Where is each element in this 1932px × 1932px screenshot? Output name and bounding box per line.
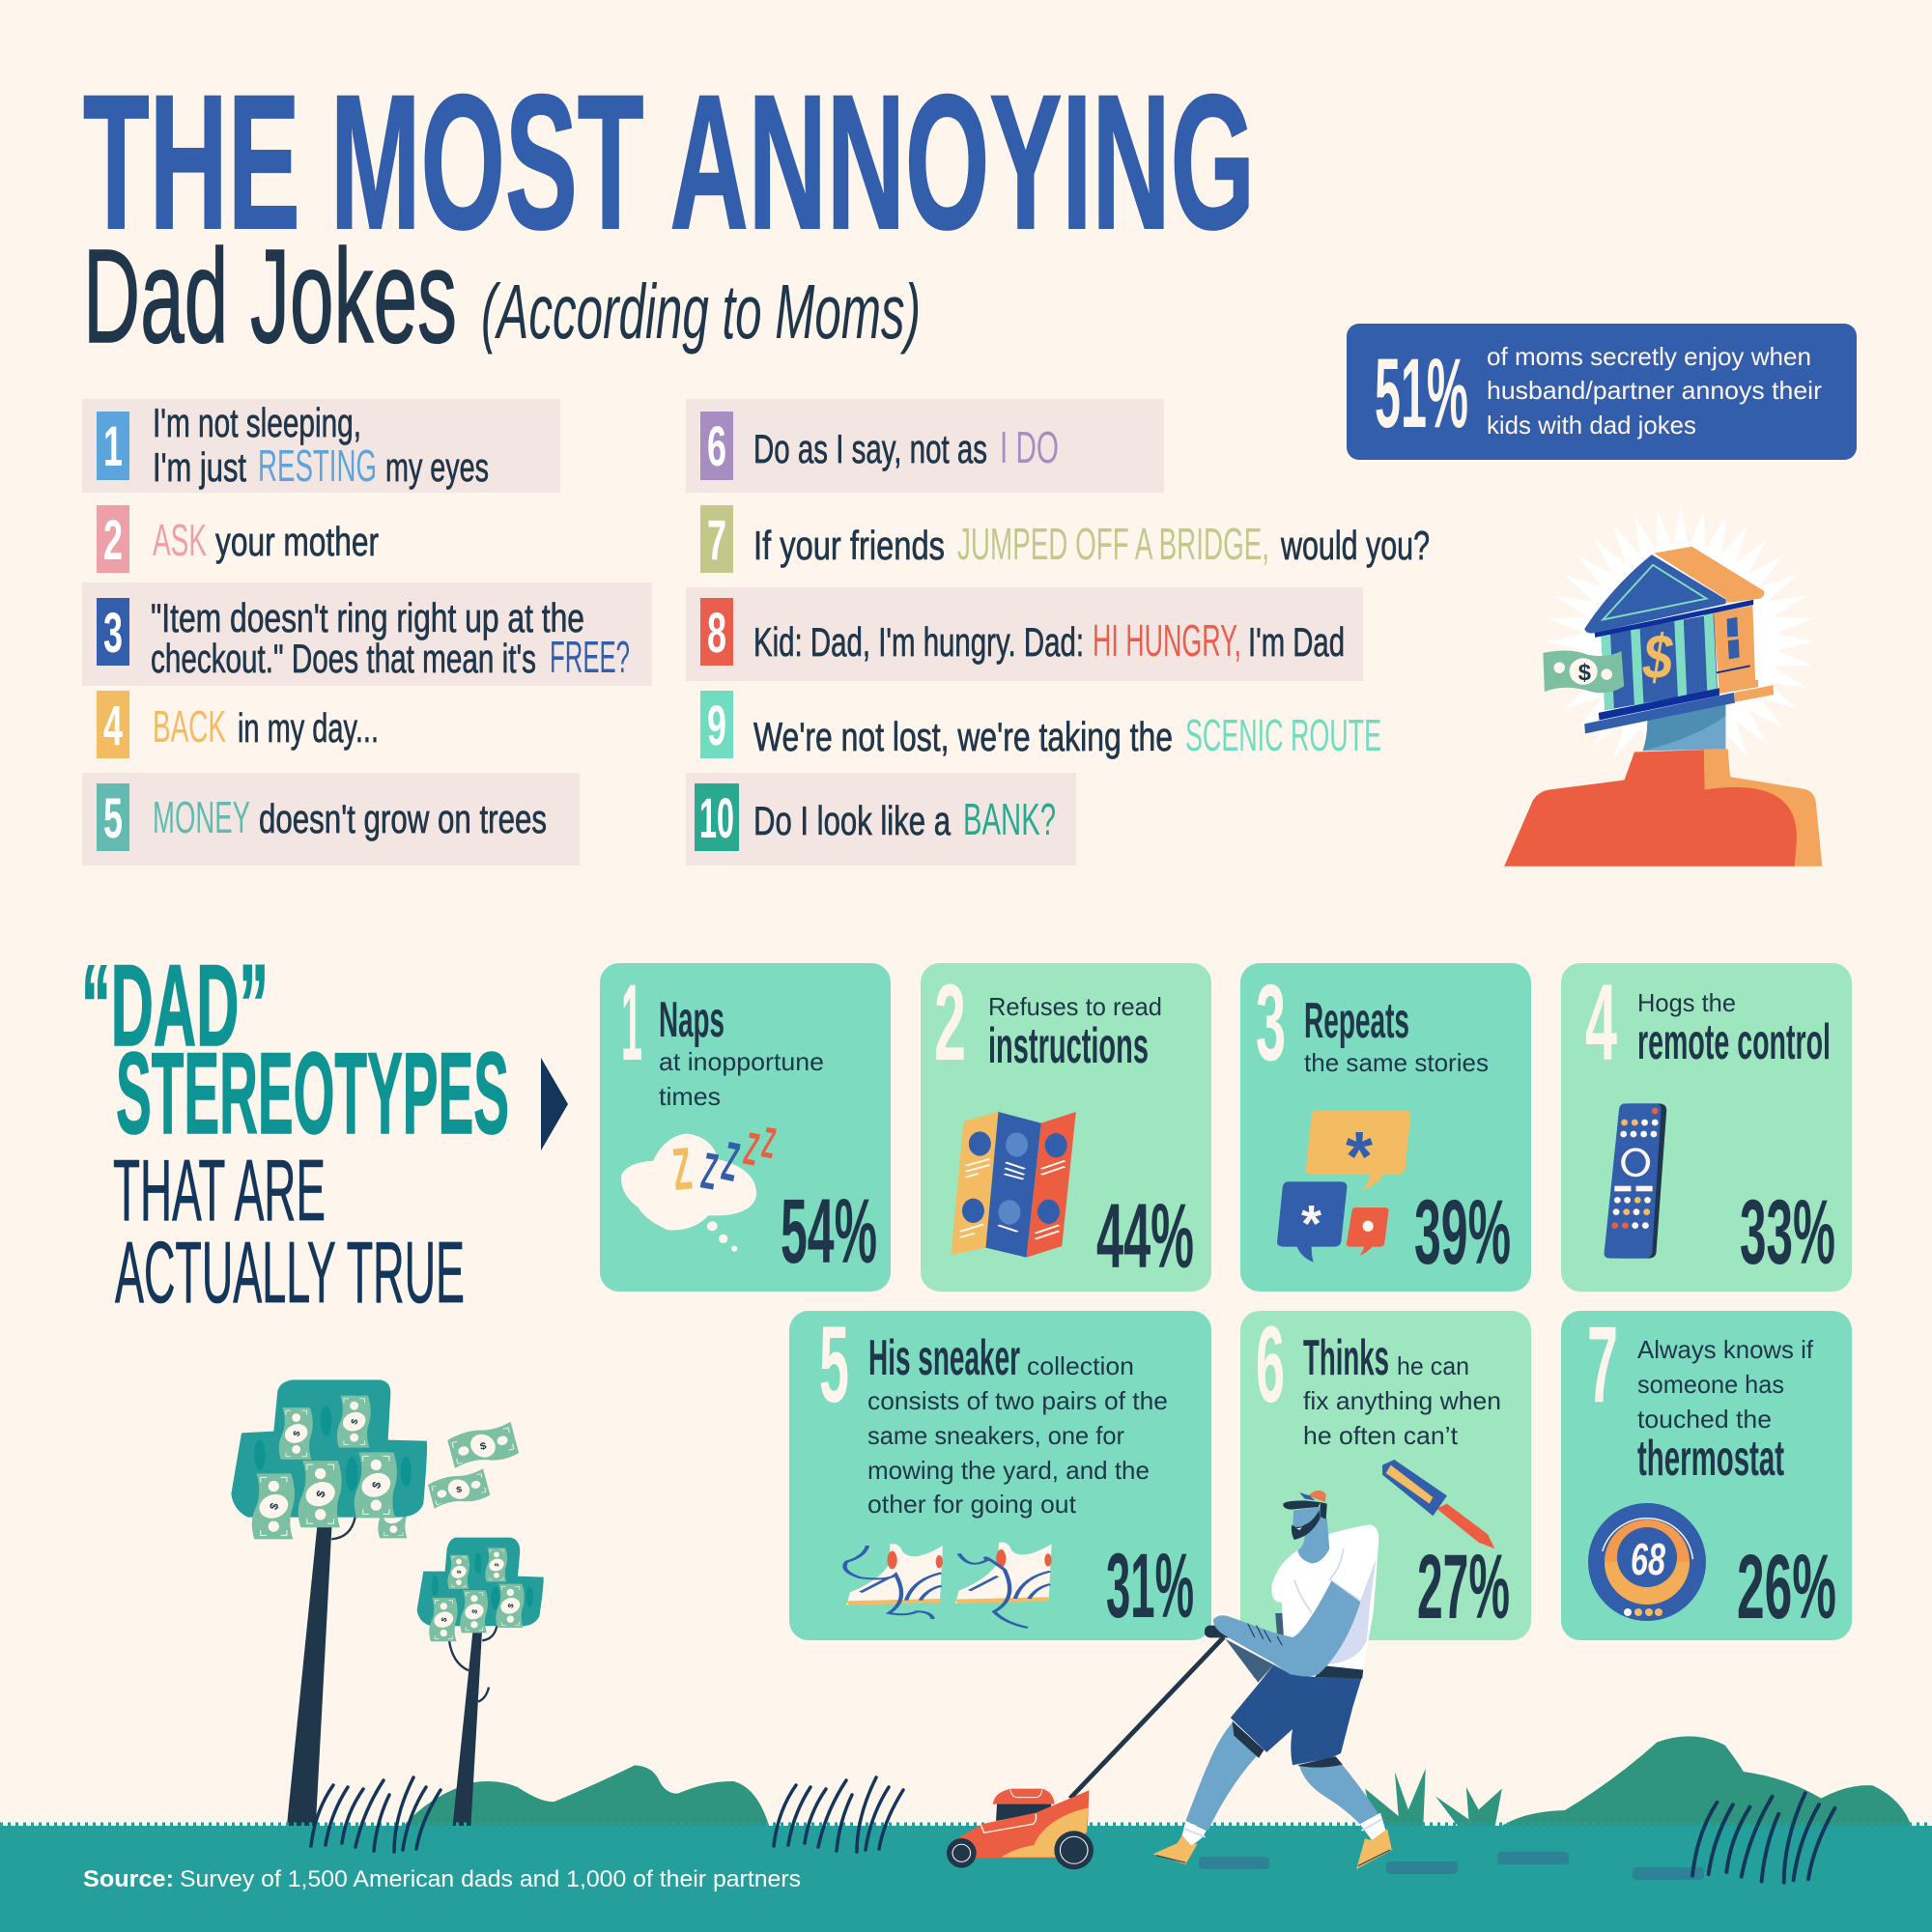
- callout: 51% of moms: husband/partner annoys their: [1487, 376, 1822, 405]
- money tree large and small: $: [350, 1417, 361, 1426]
- joke 1: my eyes: [385, 444, 489, 490]
- heading: dad stereotypes: “DAD”: [81, 941, 269, 1070]
- joke 1: RESTING: [258, 440, 377, 491]
- list of dad jokes: [82, 399, 1430, 866]
- money tree large and small: $: [292, 1429, 303, 1437]
- joke 6: I DO: [1000, 422, 1059, 472]
- callout: 51% of moms: [1347, 324, 1857, 460]
- lawnmower: [947, 1637, 1224, 1869]
- panel: stereotype 4 remote: Hogs the: [1637, 988, 1736, 1017]
- panel: stereotype 2 instructions: Refuses to read: [988, 992, 1162, 1021]
- panel: stereotype 2 instructions: instructions: [988, 1018, 1149, 1074]
- joke 7: would you?: [1280, 523, 1430, 568]
- icon: speech bubbles: *: [1346, 1119, 1373, 1196]
- joke 7: If your friends: [753, 523, 945, 568]
- icon: sleep cloud: Z: [697, 1141, 722, 1201]
- joke 9: [700, 691, 1381, 760]
- panel: stereotype 5 sneakers: other for going out: [867, 1490, 1077, 1519]
- panel: stereotype 3 repeats: 39%: [1414, 1181, 1511, 1284]
- panel: stereotype 6 thinks he can fix: he can: [1397, 1351, 1469, 1380]
- panel: stereotype 5 sneakers: consists of two pairs of the: [867, 1386, 1168, 1415]
- panel: stereotype 7 thermostat: [1561, 1304, 1852, 1640]
- money tree large and small: $: [494, 1562, 501, 1568]
- heading: dad stereotypes: THAT ARE: [113, 1143, 326, 1239]
- panel: stereotype 1 naps: times: [659, 1082, 721, 1111]
- panel: stereotype 1 naps: at inopportune: [659, 1047, 824, 1076]
- joke 7: 7: [707, 509, 726, 572]
- icon: screwdriver: [1382, 1460, 1494, 1548]
- icon: instruction brochure: [951, 1112, 1076, 1258]
- money tree large and small: $: [440, 1616, 449, 1623]
- money tree large and small: $: [313, 1489, 328, 1499]
- money tree large and small: $: [479, 1441, 487, 1453]
- icon: sneakers: [845, 1542, 1052, 1628]
- grass tufts: [311, 1777, 1835, 1883]
- joke 3: checkout." Does that mean it's: [151, 636, 536, 681]
- money tree large and small: $: [456, 1569, 464, 1575]
- joke 2: ASK: [153, 515, 207, 565]
- joke 8: 8: [707, 602, 726, 665]
- joke 5: 5: [103, 787, 123, 850]
- panel: stereotype 4 remote: 4: [1585, 962, 1617, 1083]
- arrow: [541, 1058, 568, 1151]
- icon: sleep cloud: Z: [717, 1130, 744, 1194]
- money tree large and small: $: [267, 1501, 282, 1512]
- panel: stereotype 3 repeats: Repeats: [1304, 993, 1409, 1049]
- panel: stereotype 7 thermostat: 26%: [1737, 1536, 1836, 1638]
- joke 4: in my day...: [238, 705, 379, 751]
- joke 8: HI HUNGRY,: [1093, 615, 1241, 666]
- joke 2: 2: [103, 509, 123, 572]
- heading: dad stereotypes: ACTUALLY TRUE: [115, 1225, 465, 1321]
- joke 9: SCENIC ROUTE: [1185, 710, 1381, 760]
- icon: bank-headed dad: $: [1642, 622, 1673, 693]
- money tree large and small: $: [456, 1485, 464, 1495]
- panel: stereotype 3 repeats: 3: [1256, 962, 1286, 1083]
- title: [83, 55, 1255, 371]
- panel: stereotype 5 sneakers: 5: [819, 1304, 849, 1425]
- panel: stereotype 4 remote: [1561, 962, 1852, 1292]
- joke 6: [686, 399, 1164, 493]
- ground: [0, 1825, 1932, 1932]
- joke 10: 10: [699, 787, 734, 850]
- joke 1: 1: [103, 415, 123, 478]
- panel: stereotype 6 thinks he can fix: fix anything when: [1303, 1386, 1501, 1415]
- money tree large and small: [231, 1379, 544, 1829]
- panel: stereotype 6 thinks he can fix: 27%: [1417, 1536, 1510, 1638]
- panel: stereotype 7 thermostat: someone has: [1637, 1370, 1784, 1399]
- joke 5: MONEY: [153, 792, 250, 842]
- money tree large and small: $: [469, 1607, 479, 1615]
- joke 8: [686, 587, 1363, 681]
- man pushing lawnmower: [947, 1491, 1392, 1869]
- callout: 51% of moms: of moms secretly enjoy when: [1487, 342, 1811, 371]
- joke 8: Kid: Dad, I'm hungry. Dad:: [753, 619, 1084, 665]
- callout: 51% of moms: kids with dad jokes: [1487, 411, 1696, 440]
- hills and grass plants: [401, 1736, 1913, 1829]
- icon: speech bubbles: [1277, 1110, 1410, 1263]
- panel: stereotype 5 sneakers: mowing the yard, and the: [867, 1456, 1150, 1485]
- panel: stereotype 5 sneakers: His sneaker: [868, 1330, 1020, 1386]
- callout: 51% of moms: 51%: [1375, 338, 1468, 448]
- panel: stereotype 1 naps: [600, 962, 891, 1292]
- joke 1: [82, 399, 560, 493]
- joke 9: We're not lost, we're taking the: [753, 714, 1173, 759]
- panel: stereotype 5 sneakers: collection: [1027, 1351, 1134, 1380]
- joke 10: BANK?: [963, 794, 1056, 844]
- joke 2: your mother: [215, 519, 379, 564]
- joke 1: I'm just: [153, 444, 246, 490]
- joke 5: [82, 773, 580, 866]
- panel: stereotype 5 sneakers: [789, 1304, 1211, 1640]
- title: (According to Moms): [481, 269, 921, 355]
- panel: stereotype 1 naps: 54%: [781, 1180, 877, 1283]
- joke 4: BACK: [153, 701, 226, 752]
- icon: bank-headed dad: $: [1578, 661, 1591, 686]
- panel: stereotype 7 thermostat: thermostat: [1637, 1431, 1784, 1487]
- icon: sleep cloud: [621, 1119, 779, 1252]
- joke 2: [97, 505, 379, 573]
- joke 9: 9: [707, 695, 726, 757]
- joke 8: I'm Dad: [1248, 619, 1345, 665]
- joke 10: [686, 773, 1076, 866]
- source: Source:: [83, 1866, 174, 1892]
- text: STEREOTYPES: [116, 1029, 509, 1158]
- joke 6: Do as I say, not as: [753, 426, 987, 471]
- money tree large and small: $: [506, 1602, 516, 1609]
- panel: stereotype 5 sneakers: 31%: [1106, 1535, 1194, 1637]
- panel: stereotype 1 naps: Naps: [659, 992, 724, 1048]
- joke 7: [700, 505, 1430, 573]
- panel: stereotype 7 thermostat: 7: [1587, 1304, 1618, 1425]
- joke 6: 6: [707, 415, 726, 478]
- icon: remote control: [1605, 1103, 1666, 1259]
- joke 3: 3: [103, 602, 123, 665]
- panel: stereotype 2 instructions: 44%: [1096, 1185, 1194, 1288]
- joke 3: "Item doesn't ring right up at the: [151, 595, 584, 640]
- money tree large and small: $: [369, 1480, 384, 1491]
- icon: sleep cloud: Z: [758, 1119, 779, 1168]
- joke 3: FREE?: [550, 632, 630, 682]
- icon: sleep cloud: Z: [740, 1122, 763, 1176]
- joke 1: I'm not sleeping,: [153, 400, 361, 445]
- icon: bank-headed dad: [1504, 507, 1822, 867]
- panel: stereotype 6 thinks he can fix: [1240, 1304, 1531, 1640]
- icon: speech bubbles: *: [1301, 1195, 1321, 1253]
- panel: stereotype 3 repeats: [1240, 962, 1531, 1292]
- title: Dad Jokes: [83, 222, 457, 371]
- joke 4: [97, 691, 379, 758]
- panel: stereotype 6 thinks he can fix: Thinks: [1303, 1330, 1389, 1386]
- panel: stereotype 7 thermostat: Always knows if: [1637, 1335, 1814, 1364]
- joke 10: Do I look like a: [753, 798, 951, 843]
- icon: thermostat: 68: [1631, 1534, 1665, 1584]
- panel: stereotype 6 thinks he can fix: he often can’t: [1303, 1421, 1459, 1450]
- panel: stereotype 3 repeats: the same stories: [1304, 1048, 1489, 1077]
- source: Survey of 1,500 American dads and 1,000 of their partners: [180, 1866, 801, 1892]
- panel: stereotype 4 remote: 33%: [1740, 1181, 1835, 1284]
- panel: stereotype 2 instructions: [921, 962, 1211, 1292]
- panel: stereotype 2 instructions: 2: [934, 962, 966, 1083]
- joke 4: 4: [103, 695, 123, 757]
- panel: stereotype 5 sneakers: same sneakers, one for: [867, 1421, 1124, 1450]
- icon: thermostat: [1588, 1503, 1706, 1621]
- joke 7: JUMPED OFF A BRIDGE,: [957, 519, 1269, 569]
- panel: stereotype 6 thinks he can fix: 6: [1256, 1304, 1285, 1425]
- icon: sleep cloud: Z: [669, 1136, 695, 1204]
- panel: stereotype 7 thermostat: touched the: [1637, 1405, 1772, 1434]
- joke 5: doesn't grow on trees: [259, 796, 547, 841]
- joke 3: [82, 582, 652, 686]
- panel: stereotype 1 naps: 1: [621, 962, 642, 1083]
- sunburst: [1546, 507, 1815, 763]
- heading: dad stereotypes: [81, 941, 509, 1321]
